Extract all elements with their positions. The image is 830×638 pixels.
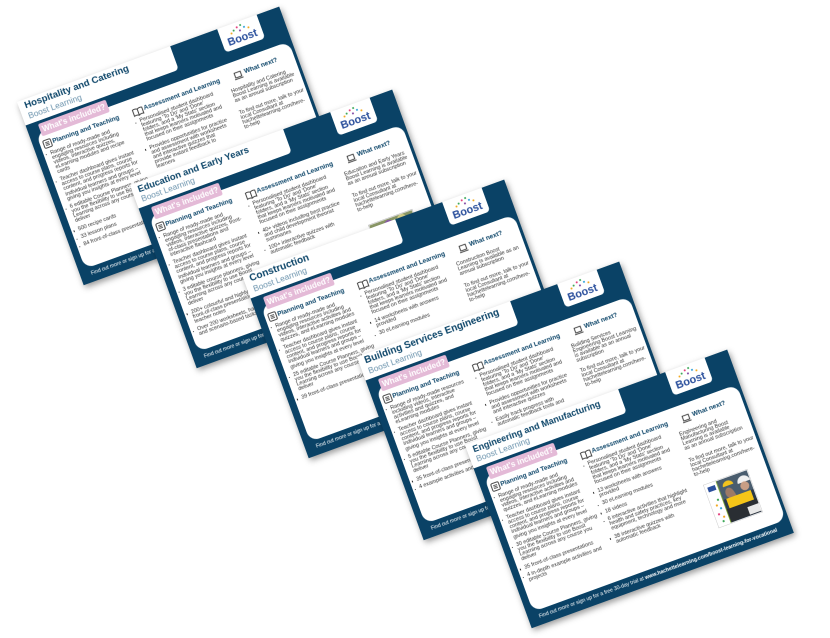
bullets: assessment: folders, and a 'My Stats' section: [482, 357, 556, 388]
bullets: assessment: 40+ videos including best practice: [262, 200, 341, 234]
column title: what next: What next?: [468, 229, 503, 248]
bullets: planning: activities and quizzes, and: [393, 393, 455, 421]
footer: Find out more or sign up for a free 30-day trial at www.hachettelearning.com/boost-learning-for-vocational: [315, 358, 555, 450]
text: contact: to-help: [693, 467, 711, 479]
bullets: planning: including videos, interactive: [391, 387, 456, 416]
bullets: planning: 35 front-of-class presentations: [416, 452, 486, 482]
bullets: planning: 200+ colourful and highly: [190, 289, 249, 315]
icon: laptop: [681, 413, 692, 424]
bullets: planning: deliver: [187, 296, 204, 307]
bullets: assessment: focused on their assignments: [594, 456, 662, 486]
footer: Find out more or sign up for a free 30-day trial at www.hachettelearning.com/boost-learning-for-vocational: [538, 528, 778, 620]
text: contact: To find out more, talk to your: [688, 435, 755, 464]
bullets: planning: giving you insights at every level: [66, 170, 142, 202]
text: contact: to-help: [244, 119, 261, 131]
bullets: planning: Range of ready-made resources: [389, 379, 465, 411]
bullets: planning: 6 editable Course Planners, giving: [69, 176, 149, 210]
bullets: planning: 30 editable Course Planners, giving: [515, 513, 598, 548]
text: subscription: Engineering and: [678, 418, 718, 437]
bullets: assessment: 13 worksheets with answers: [597, 465, 663, 494]
bullets: planning: giving you insights at every level: [290, 338, 365, 370]
bullets: planning: [158, 212, 271, 337]
flyer: Engineering and Manufacturing: [465, 350, 794, 628]
icon: planner: [267, 311, 278, 322]
bullets: planning: Teacher dashboard gives instant: [506, 489, 581, 521]
bullets: planning: Learning across any course you: [411, 438, 485, 470]
logo: [217, 15, 265, 53]
bullets: planning: 39 front-of-class presentations: [301, 370, 371, 400]
bullets: planning: you the flexibility to use Boost: [184, 268, 253, 298]
bullets: assessment: 100+ interactive quizzes with: [268, 222, 336, 251]
bullets: assessment: 38 interactive quizzes with: [613, 513, 675, 540]
column title: planning: Planning and Teaching: [391, 369, 460, 399]
bullets: assessment: Personalised student dashboard: [587, 435, 662, 467]
text: subscription: as an annual subscription: [234, 77, 294, 104]
text: subscription: Engineering Boost Learning: [572, 326, 637, 354]
bullets: planning: engaging resources including: [51, 131, 120, 161]
title tab: [17, 46, 179, 125]
bullets: planning: videos, interactive activities and: [278, 307, 352, 339]
flyer: Construction: [242, 180, 571, 458]
text: subscription: Building Services: [570, 329, 612, 349]
bullets: planning: Learning across any course you: [186, 271, 260, 303]
bullets: assessment: provided: [599, 486, 620, 499]
bullets: planning: deliver: [298, 381, 315, 393]
text: subscription: Boost Learning is available: [232, 71, 295, 99]
subheading: Boost Learning: [140, 174, 196, 203]
text: contact: hachettelearning.com/here-: [242, 98, 306, 126]
text: contact: local Consultant at: [465, 273, 509, 294]
column title: what next: What next?: [356, 139, 391, 158]
footer: Find out more or sign up for a free 30-day trial at www.hachettelearning.com/boost-learning-for-vocational: [203, 268, 443, 360]
text: contact: [688, 436, 760, 479]
bullets: planning: 25 editable Course Planners, giving: [292, 343, 375, 378]
icon: planner: [42, 138, 53, 149]
text: contact: to-help: [585, 377, 602, 389]
text: subscription: Learning is available as an: [457, 245, 520, 272]
bullets: planning: cards: [56, 165, 71, 175]
text: subscription: Construction Boost: [455, 246, 501, 267]
bullets: planning: access to course plans, course: [284, 325, 357, 356]
bullets: assessment: Easily track progress with: [495, 397, 555, 423]
text: contact: hachettelearning.com/here-: [692, 445, 756, 474]
bullets: assessment: featuring 'To Do' and 'Done': [254, 183, 318, 212]
bullets: planning: Range of ready-made and: [162, 212, 224, 239]
logo: [442, 188, 490, 226]
column title: what next: What next?: [243, 56, 278, 75]
bullets: planning: Teacher dashboard gives instant: [398, 401, 473, 433]
text: subscription: is available as an annual: [574, 333, 632, 359]
bullets: planning: [46, 129, 154, 248]
column title: what next: What next?: [691, 399, 726, 418]
bullets: planning: 5 editable Course Planners, giving: [407, 426, 487, 460]
text: contact: [238, 87, 306, 131]
bullets: planning: interactive flashcard: [169, 236, 217, 258]
bullets: assessment: 18 videos: [604, 501, 628, 515]
bullets: planning: eLearning modules and recipe: [55, 140, 126, 170]
column title: assessment: Assessment and Learning: [368, 250, 446, 284]
text: contact: hachettelearning.com/here-: [583, 356, 647, 384]
bullets: planning: content, and progress reports for: [63, 160, 139, 193]
text: subscription: subscription: [576, 348, 605, 364]
heading: Building Services Engineering: [363, 307, 501, 366]
bullets: assessment: that keeps learners motivated and: [369, 278, 448, 311]
text: subscription: Hospitality and Catering: [230, 69, 287, 94]
bullets: assessment: focused on their assignments: [146, 113, 214, 143]
logo: Boost: [226, 27, 259, 48]
bullets: assessment: [135, 92, 228, 170]
icon: planner: [490, 481, 501, 492]
bullets: planning: videos, interactive activities and: [501, 477, 575, 509]
bullets: planning: 33 lesson plans: [80, 222, 118, 240]
bullets: planning: access to course plans, course: [399, 407, 472, 438]
text: subscription: as an annual subscription: [347, 160, 407, 187]
bullets: planning: content, and progress reports for: [401, 410, 477, 443]
text: contact: local Consultant at: [240, 100, 284, 121]
text: subscription: Boost Learning is available: [345, 154, 408, 182]
bullets: assessment: Personalised student dashboard: [479, 347, 554, 379]
bullets: planning: of-class presentations and: [168, 226, 229, 253]
bullets: planning: deliver: [521, 551, 538, 563]
logo: [665, 358, 713, 396]
icon: laptop: [346, 153, 357, 164]
text: contact: [351, 170, 419, 214]
footer: Find out more or sign up for a free 30-day trial at www.hachettelearning.com/boost-learning-for-vocational: [430, 440, 670, 532]
icon: laptop: [458, 243, 469, 254]
bullets: assessment: featuring 'To Do' and 'Done': [366, 273, 430, 302]
bullets: assessment: that keeps learners motivated and: [257, 188, 336, 221]
column title: what next: What next?: [583, 311, 618, 330]
bullets: planning: Range of ready-made and: [497, 472, 559, 499]
subheading: Boost Learning: [367, 346, 423, 375]
logo: Boost: [674, 370, 707, 391]
bullets: planning: Teacher dashboard gives instant: [172, 234, 248, 266]
bullets: assessment: that keeps learners motivated and: [484, 360, 563, 393]
bullets: planning: you the flexibility to use Boost: [294, 353, 364, 383]
bullets: assessment: Personalised student dashboard: [364, 265, 439, 297]
heading: Engineering and Manufacturing: [471, 399, 602, 454]
text: contact: To find out more, talk to your: [463, 260, 530, 289]
icon: laptop: [233, 70, 244, 80]
bullets: planning: Over 200 worksheets, handouts: [197, 301, 271, 333]
thumbnail: brochure cover: [480, 299, 540, 358]
bullets: assessment: [360, 264, 448, 337]
bullets: assessment: [583, 434, 688, 545]
icon: book: [580, 449, 593, 460]
bullets: planning: content, and progress reports for: [286, 328, 362, 361]
icon: planner: [155, 221, 166, 232]
icon: book: [244, 189, 258, 200]
bullets: planning: teacher notes: [194, 308, 227, 325]
bullets: planning: quizzes, and eLearning modules: [280, 311, 355, 343]
bullets: planning: 500 recipe cards: [77, 213, 117, 232]
bullets: planning: you the flexibility to use Boost: [409, 435, 479, 465]
bullets: assessment: that keeps learners motivated and: [144, 105, 223, 138]
bullets: assessment: Provides opportunities for practice: [149, 117, 228, 151]
text: contact: To find out more, talk to your: [238, 87, 305, 116]
bullets: planning: individual learners and groups –: [288, 334, 362, 366]
bullets: assessment: and assessment with worksheets: [491, 378, 568, 411]
bullets: planning: Teacher dashboard gives instant: [283, 319, 358, 351]
text: contact: [579, 345, 647, 389]
pill: what's included: What's included?: [41, 102, 107, 134]
subheading: Boost Learning: [27, 91, 83, 120]
logo: [330, 98, 378, 136]
bullets: planning: 84 front-of-class presentations: [83, 217, 154, 248]
bullets: planning: content, and progress reports for: [509, 498, 585, 531]
bullets: planning: individual learners and groups –: [403, 416, 477, 448]
bullets: assessment: featuring 'To Do' and 'Done': [141, 100, 205, 129]
bullets: planning: access to course plans, course: [61, 157, 133, 188]
bullets: assessment: folders, and a 'My Stats' section: [367, 275, 441, 306]
icon: book: [472, 361, 485, 372]
text: contact: To find out more, talk to your: [579, 345, 646, 374]
bullets: assessment: automatic feedback: [615, 523, 662, 545]
column title: assessment: Assessment and Learning: [256, 160, 334, 194]
title tab: [130, 129, 292, 208]
title tab: [357, 301, 519, 380]
text: subscription: Manufacturing Boost: [680, 419, 729, 442]
white panel: [484, 384, 786, 612]
icon: planner: [382, 393, 393, 404]
bullets: assessment: health and safety practices, key: [609, 495, 682, 527]
logo: [557, 270, 605, 308]
text: subscription: as an annual subscription: [684, 425, 744, 452]
text: contact: to-help: [469, 292, 486, 304]
title tab: [242, 219, 404, 298]
bullets: planning: 35 front-of-class presentations: [524, 540, 594, 570]
text: contact: [463, 260, 531, 304]
bullets: planning: deliver: [413, 463, 430, 475]
bullets: planning: giving you insights at every level: [513, 508, 588, 540]
icon: book: [132, 106, 145, 118]
bullets: planning: 4 example activities and projects: [418, 458, 494, 490]
bullets: planning: [270, 302, 375, 401]
bullets: assessment: 30 eLearning modules: [378, 313, 431, 337]
column title: assessment: Assessment and Learning: [143, 77, 221, 111]
bullets: planning: engaging resources including: [499, 474, 568, 504]
icon: laptop: [573, 325, 584, 336]
text: contact: hachettelearning.com/here-: [355, 181, 419, 209]
bullets: assessment: Provides opportunities for practice: [489, 372, 568, 406]
heading: Education and Early Years: [136, 144, 250, 194]
bullets: planning: and scenario-based tasks: [198, 311, 259, 337]
white panel: [261, 214, 563, 442]
bullets: assessment: featuring 'To Do' and 'Done': [589, 443, 653, 472]
bullets: planning: [494, 472, 603, 583]
bullets: planning: you the flexibility to use Boost: [517, 523, 587, 553]
bullets: planning: 4 in-depth example activities and: [526, 546, 603, 578]
bullets: planning: deliver: [74, 213, 91, 224]
bullets: planning: Learning across any course you: [296, 356, 370, 388]
footer: Find out more or sign up for a free 30-day trial at www.hachettelearning.com/boost-learning-for-vocational: [90, 185, 330, 277]
bullets: assessment: focused on their assignments: [259, 196, 327, 226]
text: subscription: Education and Early Years: [343, 150, 405, 177]
bullets: assessment: summaries: [265, 229, 292, 244]
text: contact: local Consultant at: [690, 448, 734, 469]
bullets: planning: content, and progress reports for: [176, 243, 252, 276]
bullets: assessment: and interactive quizzes that: [152, 132, 216, 161]
thumbnail: brochure cover: [368, 209, 414, 228]
bullets: planning: Range of ready-made and: [49, 129, 111, 156]
bullets: planning: Range of ready-made and: [274, 302, 336, 329]
bullets: assessment: learners: [156, 158, 176, 170]
bullets: assessment: automatic feedback: [270, 234, 316, 256]
bullets: assessment: and assessment with worksheets: [151, 123, 228, 156]
white panel: [149, 124, 451, 352]
logo: Boost: [566, 282, 599, 303]
column title: planning: Planning and Teaching: [499, 457, 568, 487]
bullets: planning: projects: [528, 571, 548, 583]
column title: planning: Planning and Teaching: [276, 287, 345, 317]
bullets: planning: videos, interactive quizzes,: [53, 138, 116, 166]
bullets: planning: individual learners and groups –: [511, 504, 585, 536]
bullets: assessment: folders, and a 'My Stats' section: [590, 445, 664, 476]
bullets: assessment: automatic feedback tools and: [497, 398, 565, 428]
bullets: planning: Teacher dashboard gives instant: [59, 151, 135, 183]
icon: book: [356, 279, 370, 290]
flyer: Education and Early Years: [130, 90, 459, 368]
bullets: planning: Learning across any course you: [73, 188, 147, 220]
bullets: assessment: and child development theorist: [264, 208, 335, 239]
logo: Boost: [451, 200, 484, 221]
bullets: assessment: 14 worksheets with answers: [374, 295, 440, 324]
pill: what's included: What's included?: [266, 275, 332, 307]
bullets: planning: access to course plans, course: [507, 495, 580, 526]
subheading: Boost Learning: [252, 264, 308, 293]
bullets: assessment: featuring 'To Do' and 'Done': [481, 355, 545, 384]
bullets: planning: giving you insights at every level: [179, 253, 255, 285]
logo: Boost: [339, 110, 372, 131]
column title: assessment: Assessment and Learning: [591, 420, 669, 454]
bullets: assessment: [248, 174, 341, 256]
bullets: assessment: folders, and a 'My Stats' section: [255, 185, 329, 216]
bullets: planning: videos, interactive quizzes, front-: [166, 216, 242, 249]
bullets: assessment: provided: [376, 316, 397, 329]
title tab: [465, 389, 627, 468]
pill: what's included: What's included?: [489, 445, 555, 477]
bullets: assessment: that keeps learners motivated and: [592, 448, 671, 481]
flyer: Hospitality and Catering: [17, 7, 346, 285]
bullets: planning: engaging resources including: [164, 214, 233, 244]
text: subscription: Learning is available: [682, 424, 730, 447]
text: contact: To find out more, talk to your: [351, 170, 418, 199]
bullets: planning: engaging resources including: [276, 304, 345, 334]
white panel: [376, 296, 678, 524]
bullets: planning: individual learners and groups –: [65, 165, 139, 197]
white panel: [36, 41, 338, 269]
column title: assessment: Assessment and Learning: [483, 332, 561, 366]
bullets: planning: eLearning modules: [395, 404, 440, 425]
bullets: planning: Learning across any course you: [519, 526, 593, 558]
bullets: assessment: Personalised student dashboard: [139, 92, 214, 124]
heading: Hospitality and Catering: [23, 63, 130, 111]
text: contact: to-help: [357, 202, 374, 214]
bullets: planning: [386, 379, 494, 490]
bullets: assessment: [475, 346, 568, 428]
flyer: Building Services Engineering: [357, 262, 686, 540]
bullets: planning: 3 editable course planners, giving: [182, 260, 260, 293]
text: contact: hachettelearning.com/here-: [467, 271, 531, 299]
bullets: assessment: folders, and a 'My Stats' section: [142, 102, 216, 133]
bullets: assessment: and interactive quizzes: [492, 391, 546, 416]
text: contact: local Consultant at: [353, 183, 397, 204]
column title: planning: Planning and Teaching: [51, 114, 120, 144]
bullets: assessment: focused on their assignments: [371, 286, 439, 316]
bullets: assessment: 6 interactive activities that highlight: [607, 488, 688, 522]
bullets: planning: quizzes, and eLearning modules: [503, 481, 578, 513]
bullets: planning: giving you insights at every level: [405, 420, 480, 452]
bullets: planning: you the flexibility to use Boost: [71, 185, 140, 215]
bullets: planning: access to course plans, course: [174, 240, 246, 271]
text: contact: local Consultant at: [581, 358, 625, 379]
bullets: assessment: provide instant feedback to: [154, 137, 217, 165]
heading: Construction: [248, 252, 311, 284]
bullets: planning: individual learners and groups –: [178, 248, 252, 280]
thumbnail: brochure cover: [703, 469, 763, 528]
pill: what's included: What's included?: [381, 357, 447, 389]
pill: what's included: What's included?: [154, 185, 220, 217]
bullets: assessment: focused on their assignments: [486, 368, 554, 398]
bullets: assessment: Personalised student dashboard: [252, 175, 327, 207]
text: subscription: annual subscription: [459, 255, 505, 277]
subheading: Boost Learning: [475, 434, 531, 463]
bullets: planning: front-of-class presentations with: [192, 288, 266, 320]
column title: planning: Planning and Teaching: [164, 197, 233, 227]
bullets: assessment: equipment, technology and more: [611, 499, 687, 532]
bullets: assessment: 30 eLearning modules: [601, 483, 654, 507]
